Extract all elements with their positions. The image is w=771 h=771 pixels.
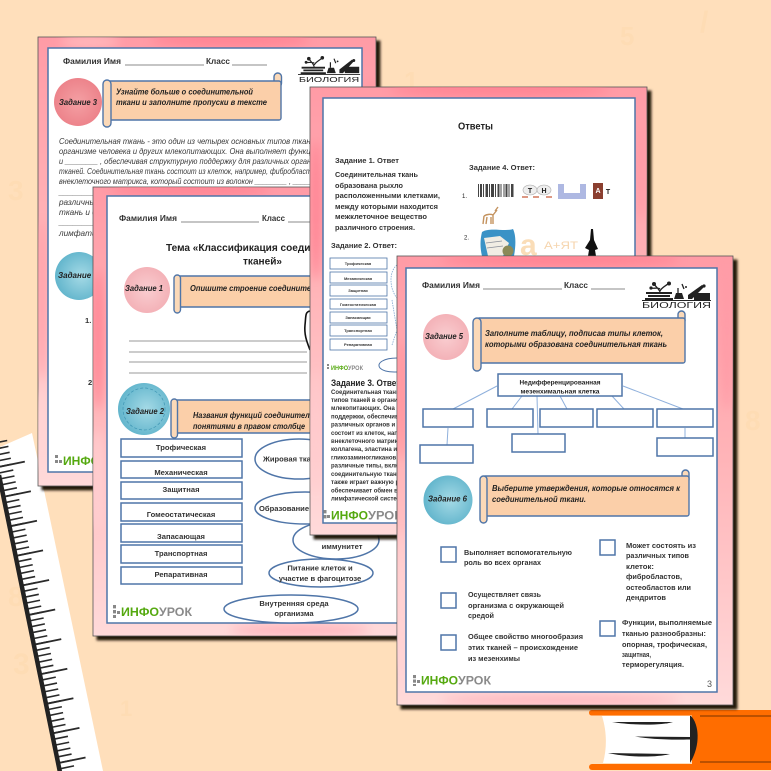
logo: biology A: БИОЛОГИЯ [299, 75, 359, 84]
icon: letters A T [593, 183, 611, 199]
checkbox statements: остеобластов или [626, 583, 691, 592]
scroll: task 1: Опишите строение соединительной ткани [190, 284, 360, 293]
concept ovals: организма [274, 609, 314, 618]
name line B: Класс [262, 213, 285, 223]
answer 1: различного строения. [335, 223, 415, 232]
faint background numerals: 8 [745, 405, 761, 436]
scroll: task 1 [174, 275, 416, 313]
answer 2: Защитная [348, 288, 368, 293]
faint background numerals: / [700, 6, 709, 39]
logo: infourok D: ИНФО [421, 674, 458, 688]
functions list: Трофическая [156, 443, 206, 452]
checkbox statements: организма с окружающей [468, 601, 564, 610]
answer 3: различных органов и тканей [331, 422, 417, 428]
answer 3: Соединительная ткань - это [331, 390, 415, 396]
answer lines [129, 341, 307, 373]
faint background numerals: 5 [620, 21, 634, 51]
icon: letters A T: А [595, 188, 601, 195]
text passage A: _________ [58, 188, 100, 197]
badge: task 5: Задание 5 [425, 332, 464, 341]
logo: infourok small: УРОК [348, 366, 363, 372]
list numbers A: 1. [85, 316, 91, 325]
logo: infourok B: УРОК [159, 605, 193, 619]
concept ovals [224, 439, 379, 623]
text passage A [58, 137, 320, 238]
scroll: task 5: которыми образована соединительная ткань [485, 340, 667, 349]
answer 3 [331, 378, 430, 502]
answer 3: коллагена, эластина и [331, 447, 397, 453]
logo: biology D: БИОЛОГИЯ [642, 301, 711, 310]
answer 1: образована рыхло [335, 181, 403, 190]
answer 3: типов тканей в организме [331, 397, 409, 404]
checkbox statements: этих тканей – происхождение [468, 643, 578, 652]
scroll: task 3: ткани и заполните пропуски в тексте [116, 98, 268, 107]
checkbox statements: фибробластов, [626, 572, 682, 581]
answer 3: гликозаминогликанов [331, 456, 396, 462]
title B [166, 242, 366, 268]
text passage A: _________ [58, 218, 100, 227]
scroll: task 2 [171, 399, 413, 438]
icon: drawn outline [305, 311, 310, 350]
inner sheet D [406, 268, 717, 692]
scroll: task 3 [103, 73, 282, 127]
answer 3: поддержки, обеспечивая [331, 414, 406, 420]
badge: task 6: Задание 6 [428, 494, 468, 504]
badge: task 2 [118, 383, 170, 435]
badge: task 3: Задание 3 [59, 98, 98, 107]
page frame D [397, 256, 733, 705]
checkbox statements: из мезенхимы [468, 654, 520, 663]
answer 1: расположенными клетками, [335, 191, 440, 200]
watercolour C [310, 84, 647, 490]
logo: biology D [642, 282, 711, 310]
icon: deer [483, 207, 498, 224]
checkbox statements: защитная, [622, 650, 651, 659]
name line B [119, 213, 330, 223]
faint background numerals: 1 [404, 66, 418, 96]
checkbox statements: Может состоять из [626, 541, 696, 550]
text passage A: различные [58, 198, 100, 207]
icon: black figure [585, 229, 598, 256]
faint background numerals: 3 [8, 175, 24, 206]
inner sheet A [48, 48, 362, 472]
checkbox statements: опорная, трофическая, [622, 640, 707, 649]
checkbox statements: Общее свойство многообразия [468, 632, 583, 641]
faint background numerals: 3 [13, 648, 30, 681]
answer 3: различные типы, включая [331, 464, 411, 470]
logo: biology A [298, 56, 360, 84]
icon: blue U [561, 184, 583, 196]
name line A: Фамилия Имя [63, 56, 121, 66]
functions list: Гомеостатическая [147, 510, 215, 519]
answer 1 [335, 156, 440, 232]
concept ovals: участие в фагоцитозе [279, 574, 361, 583]
name line B: Фамилия Имя [119, 213, 177, 223]
text passage A: Соединительная ткань - это один из четырех основных типов тканей [59, 137, 319, 146]
scroll: task 5 [473, 311, 685, 371]
answer 3: лимфатической системы [331, 496, 406, 502]
logo: infourok small [327, 364, 363, 372]
concept ovals: Жировая ткань [262, 454, 320, 464]
functions list: Транспортная [155, 549, 207, 558]
page frame C [310, 87, 647, 535]
answer 2: Механическая [344, 276, 373, 281]
answer 3: соединительную ткань [331, 472, 401, 478]
answer 4: rebuses: 2. [464, 236, 469, 242]
diagram: cell types [420, 374, 713, 463]
rebus text: А+ЯТ [544, 240, 578, 252]
book [589, 710, 771, 770]
title B: Тема «Классификация соединительных [166, 242, 366, 254]
functions list: Механическая [154, 468, 208, 477]
badge: task 6 [424, 476, 472, 524]
functions list [121, 439, 242, 584]
checkbox statements: Функции, выполняемые [622, 618, 712, 627]
checkbox statements: тканью разнообразны: [622, 629, 706, 638]
answer 2: Репаративная [344, 342, 373, 347]
answer 3: обеспечивает обмен веществ [331, 488, 420, 494]
concept ovals: Питание клеток и [287, 564, 353, 572]
faint background numerals: 1 [120, 696, 132, 721]
faint background numerals: 8 [8, 581, 24, 612]
answer 1: Соединительная ткань [335, 170, 418, 179]
checkbox statements: дендритов [626, 593, 666, 602]
scroll: task 6: Выберите утверждения, которые относятся к [492, 484, 681, 493]
answer 3: млекопитающих. Она выполняет [331, 406, 430, 412]
logo: infourok B [113, 605, 193, 619]
badge: task 1: Задание 1 [125, 284, 164, 293]
checkbox statements: средой [468, 611, 494, 620]
text passage A: тканей. Соединительная ткань состоит из клеток, например, фибробластов [59, 167, 320, 176]
logo: infourok C: УРОК [368, 508, 403, 522]
icon: letters A T: Т [606, 189, 611, 196]
heading: answers: Ответы [458, 122, 493, 132]
concept ovals: иммунитет [322, 542, 363, 551]
icon: letters T H: Т [528, 188, 533, 195]
title B: тканей» [243, 256, 282, 268]
badge: task 3 [54, 78, 102, 126]
checkbox statements: Выполняет вспомогательную [464, 548, 572, 557]
answer 3: Задание 3. Ответ: [331, 378, 403, 388]
icon: letters T H: Н [541, 188, 547, 195]
icon: letters T H [522, 185, 552, 197]
text passage A: организме человека и других млекопитающих. Она выполняет функции [59, 147, 319, 156]
answer 4: rebuses [462, 163, 611, 262]
answer 3: состоит из клеток, например [331, 431, 417, 437]
name line D: Класс [564, 280, 588, 290]
diagram: cell types: Недифференцированная [520, 380, 601, 386]
answer 2: Транспортная [344, 328, 373, 333]
scroll: task 2: Названия функций соединительной ткани соотнесите с [193, 411, 408, 420]
answer 2 [330, 241, 397, 372]
scroll: task 5: Заполните таблицу, подписав типы клеток, [485, 329, 663, 338]
diagram: cell types: мезенхимальная клетка [520, 388, 600, 396]
page number: 3 [707, 679, 712, 689]
logo: infourok D: УРОК [458, 674, 492, 688]
scroll: task 6 [480, 470, 689, 523]
answer 2: Задание 2. Ответ: [331, 241, 397, 250]
icon: blue picture [480, 229, 515, 256]
inner sheet C [323, 98, 635, 523]
badge: task 1 [124, 267, 170, 313]
checkbox statements [441, 540, 712, 669]
text passage A: и ________ , обеспечивая структурную поддержку для различных органов [59, 157, 320, 166]
inner sheet B [107, 196, 423, 623]
badge: task 2: Задание 2 [126, 407, 165, 416]
ruler [0, 433, 103, 771]
badge: task 4 [55, 252, 103, 300]
checkbox statements: Осуществляет связь [468, 590, 541, 599]
answer 4: rebuses: Задание 4. Ответ: [469, 163, 535, 172]
page: task 5-6 worksheet [397, 254, 733, 705]
page frame B [93, 187, 423, 636]
answer 1: межклеточное вещество [335, 212, 427, 221]
answer 3: также играет важную роль [331, 480, 410, 486]
answer 2: Запасающая [345, 315, 371, 320]
watercolour D [397, 254, 733, 704]
watercolour B [92, 184, 370, 635]
icon: orange letter: а [520, 229, 537, 262]
logo: infourok C: ИНФО [331, 508, 368, 522]
answer 2: Гомеостатическая [340, 302, 377, 307]
answer 4: rebuses: 1. [462, 194, 467, 200]
name line A [63, 56, 267, 66]
page: task 1-2 worksheet [92, 184, 423, 636]
watercolour A [36, 33, 377, 470]
logo: infourok C [324, 508, 403, 522]
scroll: task 2: понятиями в правом столбце [193, 422, 305, 431]
text passage A: внеклеточного матрикса, который состоит из волокон ________ , ______ [59, 177, 317, 186]
text passage A: лимфатической [58, 229, 123, 238]
answer 1: между которыми находится [335, 202, 438, 211]
name line D [422, 280, 625, 290]
answer 3: внеклеточного матрикса [331, 439, 405, 445]
name line A: Класс [206, 56, 230, 66]
functions list: Защитная [162, 485, 200, 494]
logo: infourok D [413, 674, 492, 688]
answer 2: Трофическая [345, 261, 372, 266]
list numbers A: 2 [88, 378, 92, 387]
page: answers [310, 84, 647, 535]
checkbox statements: роль во всех органах [464, 558, 542, 567]
page: task 3 worksheet [36, 33, 377, 486]
concept ovals: Образование [259, 504, 309, 513]
functions list: Репаративная [154, 570, 208, 579]
scroll: task 3: Узнайте больше о соединительной [116, 88, 253, 96]
concept ovals: Внутренняя среда [259, 599, 329, 608]
functions list: Запасающая [157, 532, 205, 541]
scroll: task 6: соединительной ткани. [492, 495, 586, 504]
page frame A [38, 37, 376, 486]
icon: barcode [478, 184, 514, 197]
name line D: Фамилия Имя [422, 280, 480, 290]
checkbox statements: клеток: [626, 562, 654, 571]
badge: task 5 [423, 314, 469, 360]
text passage A: ткань и др [59, 208, 102, 217]
logo: infourok A: ИНФО [63, 454, 100, 468]
logo: infourok small: ИНФО [331, 366, 348, 372]
checkbox statements: различных типов [626, 551, 689, 560]
badge: task 4: Задание 4 [58, 271, 98, 280]
logo: infourok B: ИНФО [121, 605, 159, 619]
list numbers A [85, 316, 92, 387]
answer 1: Задание 1. Ответ [335, 156, 399, 165]
checkbox statements: терморегуляция. [622, 660, 684, 669]
